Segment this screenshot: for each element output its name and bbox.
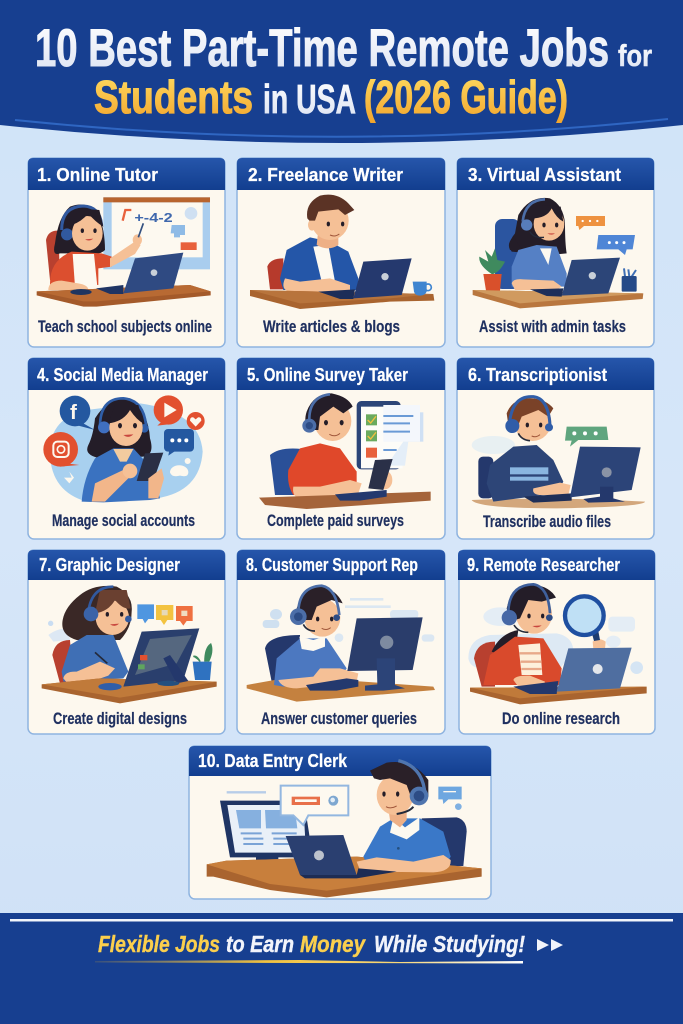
title: (2026 Guide) [364, 71, 568, 123]
caption: Complete paid surveys [267, 512, 404, 530]
heading: 3. Virtual Assistant [468, 164, 621, 185]
heading: 7. Graphic Designer [39, 554, 180, 575]
card header [237, 550, 445, 580]
panel: 1. Online Tutor [28, 158, 225, 347]
panel: 5. Online Survey Taker [237, 358, 445, 539]
heading: 10. Data Entry Clerk [198, 750, 348, 771]
illustration: social media manager with phone: f [70, 401, 77, 424]
title: for [618, 38, 652, 73]
illustration: survey taker with checklist [259, 393, 431, 509]
tagline underline [95, 960, 523, 964]
illustration: transcriptionist with headphones [472, 397, 645, 508]
card header [237, 158, 445, 190]
illustration: tutor at whiteboard: +-4-2 [134, 210, 173, 225]
caption: Teach school subjects online [38, 318, 212, 336]
panel: 2. Freelance Writer [237, 158, 445, 347]
title: in USA [263, 76, 356, 122]
caption: Assist with admin tasks [479, 318, 626, 336]
illustration: data entry clerk with monitor and laptop [207, 761, 482, 897]
caption: Manage social accounts [52, 512, 195, 530]
illustration: customer support rep at monitor [247, 586, 435, 702]
caption: Answer customer queries [261, 710, 417, 728]
heading: 6. Transcriptionist [468, 364, 607, 385]
title: Students [94, 71, 253, 123]
title [35, 19, 652, 123]
caption: Do online research [502, 710, 620, 728]
panel: 10. Data Entry Clerk [189, 746, 491, 899]
heading: 9. Remote Researcher [467, 554, 620, 575]
heading: 8. Customer Support Rep [246, 554, 418, 575]
panel: 3. Virtual Assistant [457, 158, 654, 347]
footer banner [0, 913, 683, 1024]
heading: 5. Online Survey Taker [247, 364, 408, 385]
caption: Write articles & blogs [263, 318, 400, 336]
card header [237, 358, 445, 390]
panel: 8. Customer Support Rep [237, 550, 445, 734]
card header [189, 746, 491, 776]
caption: Transcribe audio files [483, 513, 611, 531]
header banner [0, 0, 683, 143]
illustration: social media manager with phone [43, 395, 205, 502]
panel: 4. Social Media Manager [28, 358, 225, 539]
panel: 6. Transcriptionist [457, 358, 654, 539]
card header [458, 550, 655, 580]
heading: 1. Online Tutor [37, 164, 158, 185]
illustration: assistant with headset [473, 198, 643, 308]
tagline: to Earn [226, 931, 294, 957]
illustration: writer at laptop [250, 195, 434, 309]
icon: double arrow [537, 939, 563, 951]
card header [457, 158, 654, 190]
tagline: While Studying! [374, 931, 525, 957]
tagline: Flexible Jobs [98, 931, 220, 957]
heading: 4. Social Media Manager [37, 364, 208, 385]
illustration: tutor at whiteboard [37, 197, 211, 307]
panel: 9. Remote Researcher [458, 550, 655, 734]
card header [28, 550, 225, 580]
panel: 7. Graphic Designer [28, 550, 225, 734]
card header [28, 358, 225, 390]
illustration: researcher with magnifying glass [468, 584, 647, 704]
tagline [98, 931, 525, 957]
heading: 2. Freelance Writer [248, 164, 403, 185]
tagline: Money [300, 931, 366, 957]
card header [28, 158, 225, 190]
caption: Create digital designs [53, 710, 187, 728]
card header [457, 358, 654, 390]
illustration: graphic designer with drawing tablet [42, 586, 217, 703]
